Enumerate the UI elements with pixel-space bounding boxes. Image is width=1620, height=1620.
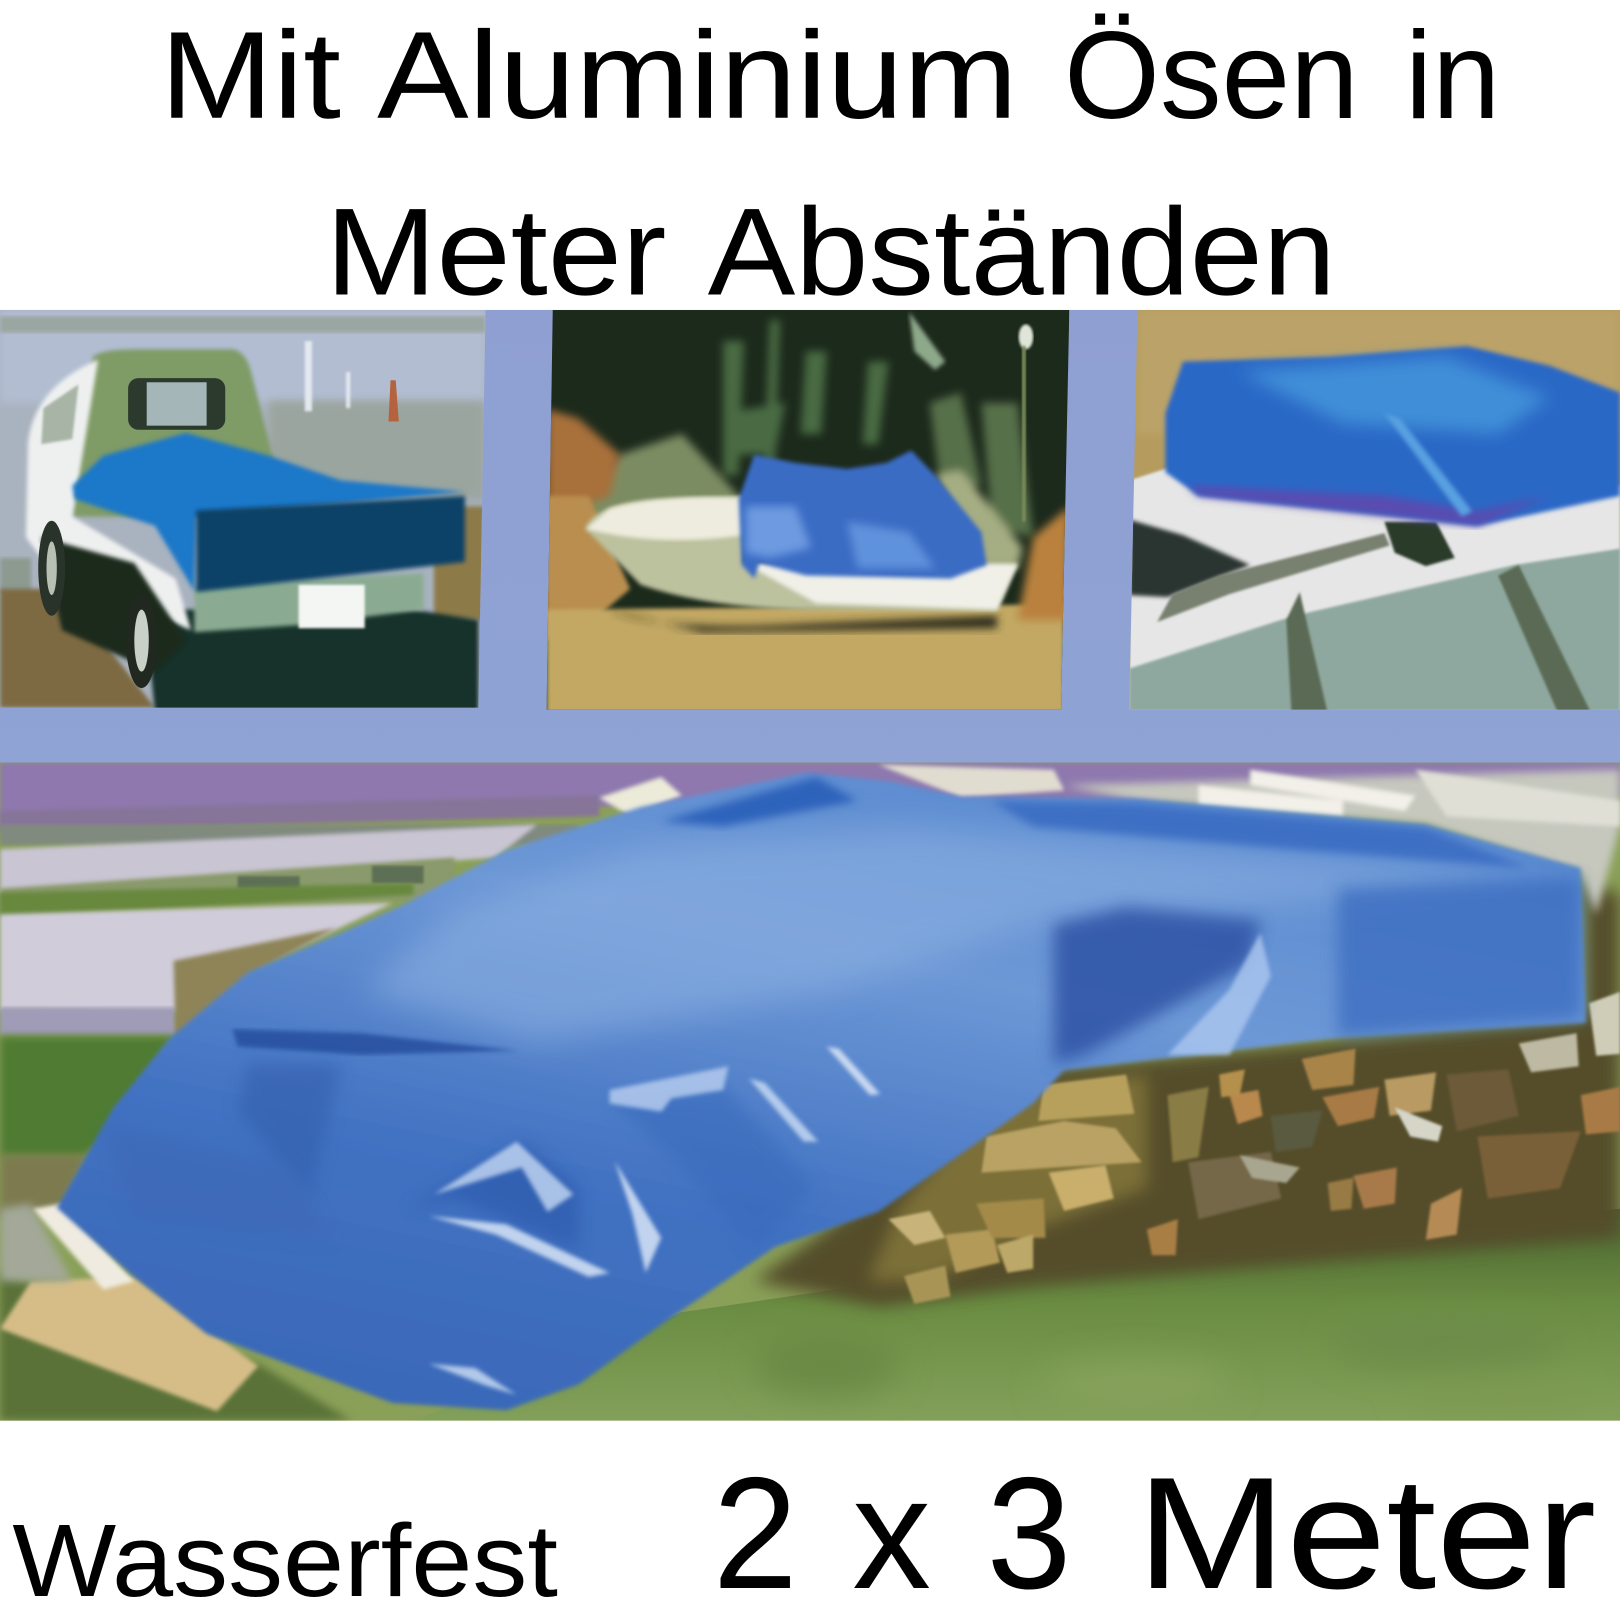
title: Abständen — [708, 183, 1336, 321]
label: 2 x 3 Meter: x — [852, 1444, 931, 1620]
luggage tarp — [1165, 346, 1620, 526]
label: 2 x 3 Meter: 2 — [713, 1444, 798, 1620]
title: Mit — [160, 7, 341, 145]
title: Meter — [325, 183, 666, 321]
big blue tarp — [57, 773, 1586, 1410]
panel: boat photo — [547, 310, 1073, 713]
label: Wasserfest: Wasserfest — [12, 1502, 558, 1618]
title: in — [1405, 7, 1500, 145]
panel: truck photo — [0, 310, 486, 713]
panel: car roof photo — [1129, 310, 1620, 713]
truck tarp — [72, 433, 465, 591]
boat tarp — [739, 450, 987, 579]
title: Ösen — [1064, 7, 1359, 145]
truck cab — [72, 349, 274, 517]
label: 2 x 3 Meter: Meter — [1136, 1444, 1596, 1620]
scrap wood on top — [1064, 770, 1620, 914]
grass — [0, 1036, 176, 1157]
title: Aluminium — [377, 7, 1018, 145]
tarp highlights — [362, 827, 1550, 1043]
label: 2 x 3 Meter — [713, 1444, 1596, 1620]
building and road — [0, 824, 537, 894]
label: 2 x 3 Meter: 3 — [987, 1444, 1071, 1620]
roof — [0, 762, 1620, 827]
wood stack — [754, 883, 1620, 1307]
title — [160, 7, 1500, 321]
lumber under tarp corner — [0, 1277, 258, 1411]
boat hull — [586, 496, 1018, 612]
car body — [1129, 465, 1620, 713]
photo collage frame — [0, 310, 1620, 770]
panel: main tarp photo — [0, 762, 1620, 1424]
